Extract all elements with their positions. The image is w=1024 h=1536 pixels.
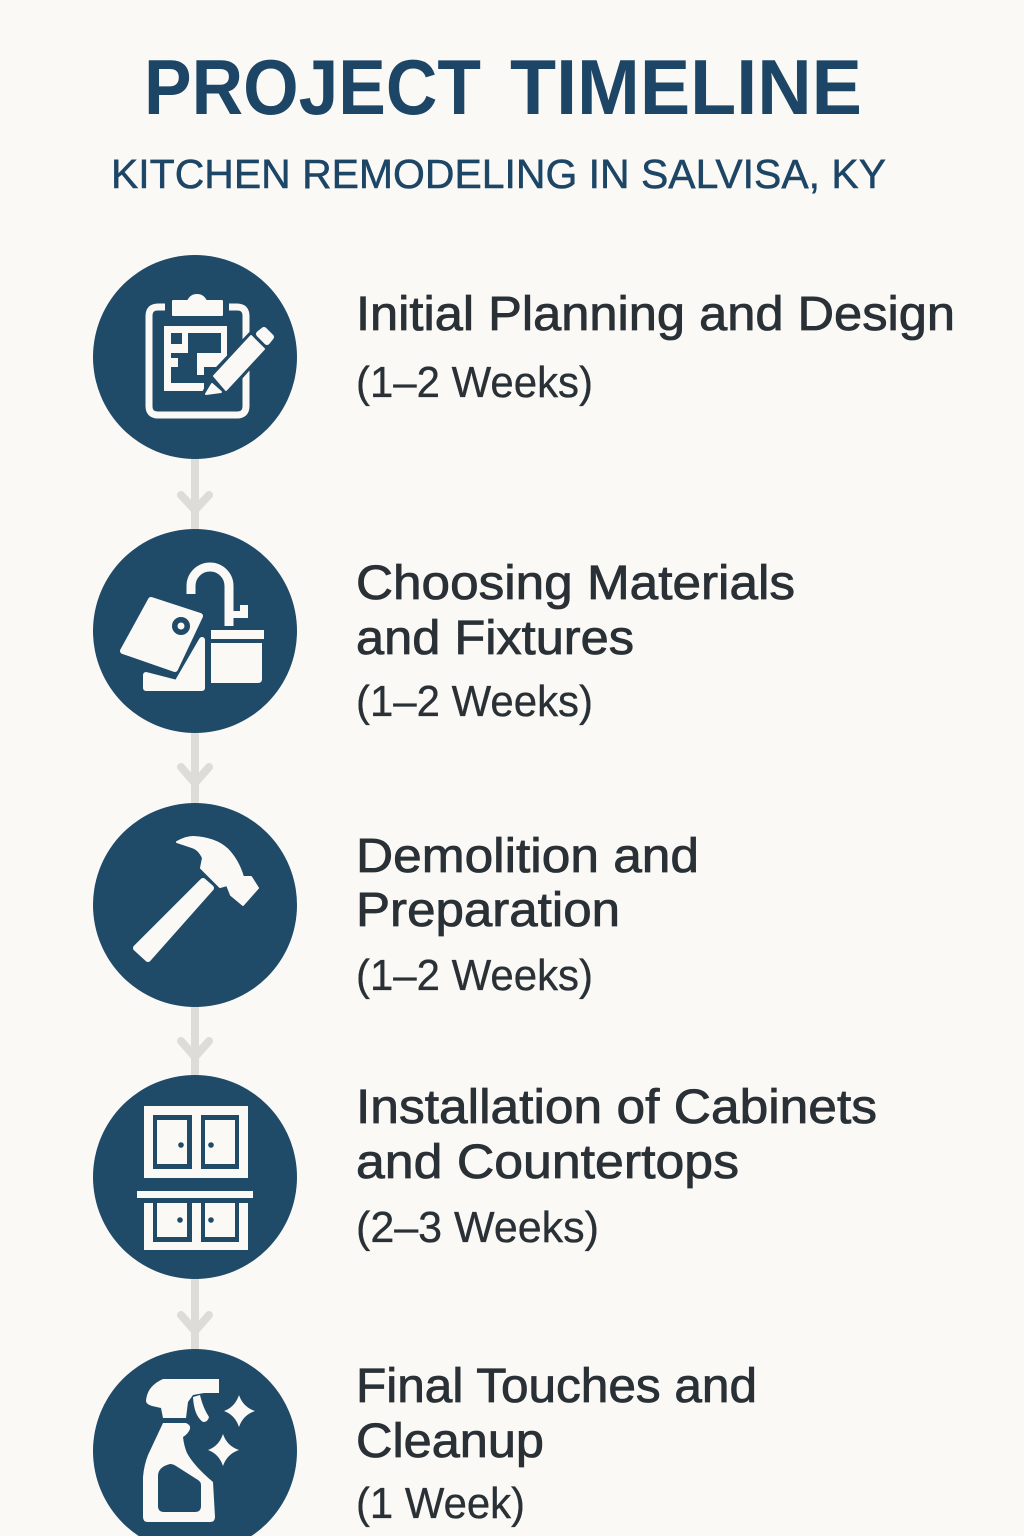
- step 2: choosing materials and fixtures: [93, 529, 795, 733]
- icon circle: step 4: [93, 1075, 297, 1279]
- icon circle: step 3: [93, 803, 297, 1007]
- step 4 duration: (2–3 Weeks): [356, 1203, 599, 1252]
- arrow: step 3 to 4: [181, 1005, 209, 1078]
- icon: clipboard with floor plan and pencil: [149, 295, 274, 415]
- step 5: final touches and cleanup: [93, 1349, 757, 1536]
- step 3 duration: (1–2 Weeks): [356, 951, 593, 1000]
- step 4: installation of cabinets and countertops: [93, 1075, 877, 1279]
- step 1 duration: (1–2 Weeks): [356, 358, 593, 407]
- title: PROJECT: [144, 43, 481, 131]
- step 3 heading: Demolition and: [356, 830, 699, 883]
- icon: spray bottle and sparkles: [143, 1379, 255, 1522]
- step 1 heading: Initial Planning and Design: [356, 288, 955, 341]
- icon circle: step 5: [93, 1349, 297, 1536]
- title: TIMELINE: [510, 43, 862, 131]
- step 3 heading: Preparation: [356, 884, 620, 937]
- step 3 heading: [356, 830, 699, 937]
- icon: swatches and faucet: [123, 567, 264, 688]
- icon circle: step 1: [93, 255, 297, 459]
- step 4 heading: and Countertops: [356, 1136, 739, 1189]
- step 1: initial planning and design: [93, 255, 955, 459]
- arrow: step 2 to 3: [181, 732, 209, 804]
- step 5 heading: Final Touches and: [356, 1360, 757, 1413]
- step 5 heading: Cleanup: [356, 1415, 544, 1468]
- step 3: demolition and preparation: [93, 803, 699, 1007]
- step 5 duration: (1 Week): [356, 1479, 525, 1528]
- arrow: step 1 to 2: [181, 458, 209, 530]
- step 2 heading: Choosing Materials: [356, 557, 795, 610]
- step 2 duration: (1–2 Weeks): [356, 677, 593, 726]
- step 4 heading: Installation of Cabinets: [356, 1081, 877, 1134]
- step 2 heading: and Fixtures: [356, 612, 634, 665]
- step 4 heading: [356, 1081, 877, 1189]
- icon: hammer: [136, 837, 258, 959]
- step 2 heading: [356, 557, 795, 665]
- title: [144, 43, 862, 131]
- icon: cabinets: [137, 1106, 253, 1250]
- step 5 heading: [356, 1360, 757, 1468]
- subtitle: KITCHEN REMODELING IN SALVISA, KY: [111, 151, 886, 197]
- icon circle: step 2: [93, 529, 297, 733]
- arrow: step 4 to 5: [181, 1278, 209, 1352]
